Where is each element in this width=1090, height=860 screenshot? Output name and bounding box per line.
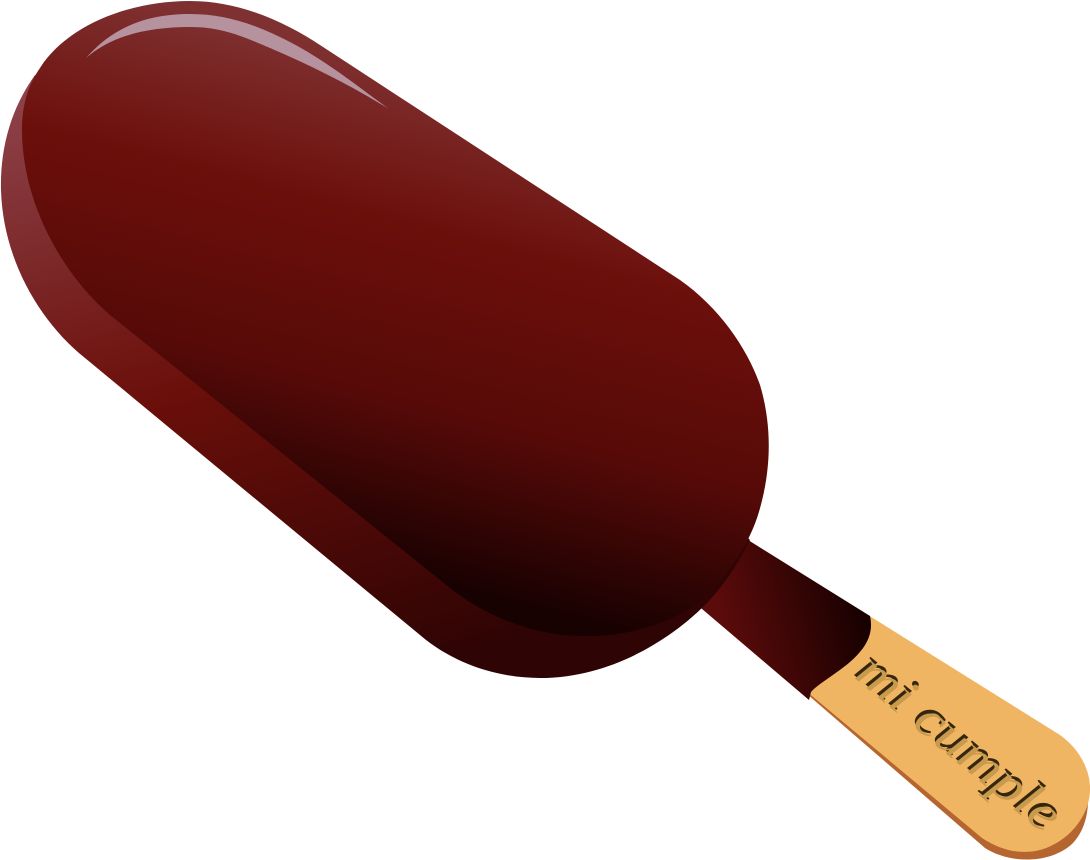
highlight	[86, 14, 389, 109]
ice cream back shell	[1, 75, 750, 678]
chocolate coating on stick	[695, 540, 871, 700]
engraved text dark edge: mi cumple	[845, 639, 1073, 841]
ice cream front face	[22, 1, 769, 636]
label: mi cumple	[844, 639, 1075, 844]
stick	[695, 540, 1090, 860]
stick face	[748, 540, 1090, 852]
stick edge shadow	[800, 688, 1088, 860]
engraved text fill: mi cumple	[846, 642, 1073, 844]
